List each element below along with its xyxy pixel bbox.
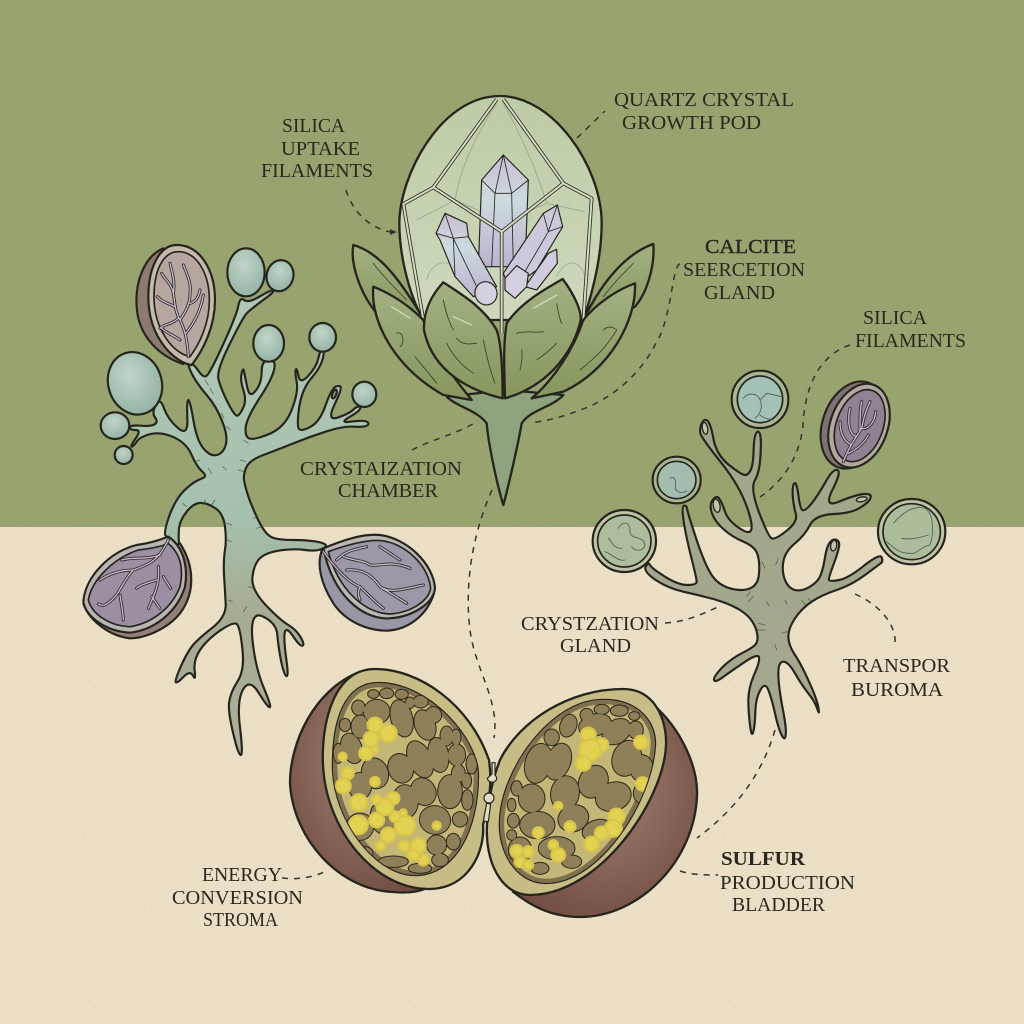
label: crystallization chamber: CRYSTAIZATION (300, 458, 462, 480)
label: silica uptake filaments (261, 115, 397, 235)
right half shell (513, 703, 697, 917)
leaf highlights (392, 295, 557, 325)
back leaf left (353, 245, 427, 323)
front leaf right (504, 279, 581, 398)
label: sulfur production bladder (680, 730, 855, 916)
leader: stalk to seed (468, 490, 495, 738)
crystal cluster (436, 155, 563, 308)
sulfur production bladder: split seed (290, 669, 697, 917)
right plant purple pod (809, 372, 901, 478)
label: energy conversion stroma: CONVERSION (172, 887, 303, 909)
label: silica uptake filaments: UPTAKE (281, 138, 360, 160)
right crystal (503, 205, 563, 290)
right plant bulb: left small (653, 457, 701, 503)
label: silica filaments: SILICA (863, 307, 928, 329)
stalk base (447, 390, 563, 505)
label: quartz crystal growth pod (577, 89, 794, 138)
left plant teal bulbs (100, 248, 376, 464)
label: quartz crystal growth pod: GROWTH POD (622, 112, 761, 134)
label: calcite secretion gland (530, 236, 805, 423)
left plant purple pod: top (136, 245, 215, 365)
small right crystal (525, 249, 557, 290)
label: energy conversion stroma (172, 864, 328, 931)
background: green upper band (0, 0, 1024, 527)
label: energy conversion stroma: STROMA (203, 909, 278, 931)
left mineral plant (83, 245, 435, 755)
label: transport stroma: BUROMA (851, 679, 944, 701)
right rim (487, 689, 666, 895)
right plant stem and roots (645, 420, 882, 738)
label: sulfur production bladder: SULFUR (721, 848, 806, 870)
left crystal (436, 213, 497, 297)
left rim (323, 669, 490, 889)
quartz crystal growth pod (353, 96, 654, 505)
label: sulfur production bladder: BLADDER (732, 894, 826, 916)
label: calcite secretion gland: GLAND (704, 282, 775, 304)
left sulfur granules (336, 718, 441, 865)
right mineral plant (593, 371, 945, 738)
hinge upper (487, 763, 497, 782)
label: crystallization gland: CRYSTZATION (521, 613, 659, 635)
label: transport stroma (843, 594, 951, 701)
left half shell (290, 672, 430, 892)
background: cream lower band (0, 527, 1024, 1024)
right inner flesh (500, 700, 655, 883)
central crystal (478, 155, 528, 267)
label: calcite secretion gland: CALCITE (705, 236, 796, 258)
dome frame (403, 99, 592, 333)
label: calcite secretion gland: SEERCETION (683, 259, 805, 281)
label: crystallization chamber: CHAMBER (338, 480, 439, 502)
hinge lower (483, 793, 494, 822)
left cells (333, 683, 478, 875)
small front crystals (505, 266, 528, 298)
right plant bulb: far right (878, 499, 945, 564)
leaf veins (373, 263, 633, 383)
right plant tube openings (701, 422, 867, 551)
label: quartz crystal growth pod: QUARTZ CRYSTAL (614, 89, 794, 111)
faint inner facets (417, 103, 585, 280)
label: silica filaments: FILAMENTS (855, 330, 966, 352)
right cells (500, 700, 655, 883)
right plant bulb: top teal (732, 371, 788, 428)
label: crystallization chamber (300, 421, 478, 502)
front leaf left (424, 282, 503, 398)
label: silica uptake filaments: FILAMENTS (261, 160, 373, 182)
label: silica uptake filaments: SILICA (282, 115, 346, 137)
side leaf left (373, 287, 472, 400)
label: crystallization gland: GLAND (560, 635, 631, 657)
left inner flesh (333, 683, 478, 875)
left plant stem and roots (130, 290, 369, 755)
right sulfur granules (511, 728, 649, 870)
right plant bulb: far left (593, 510, 656, 572)
side leaf right (532, 283, 635, 398)
label: crystallization gland (521, 607, 718, 657)
left plant purple pod: lower left (83, 537, 191, 638)
label: silica filaments (760, 307, 966, 497)
label: energy conversion stroma: ENERGY (202, 864, 282, 886)
label: transport stroma: TRANSPOR (843, 655, 951, 677)
back leaf right (585, 244, 654, 320)
left plant purple pod: lower right (320, 535, 435, 631)
glass dome (399, 96, 602, 320)
label: sulfur production bladder: PRODUCTION (720, 872, 855, 894)
